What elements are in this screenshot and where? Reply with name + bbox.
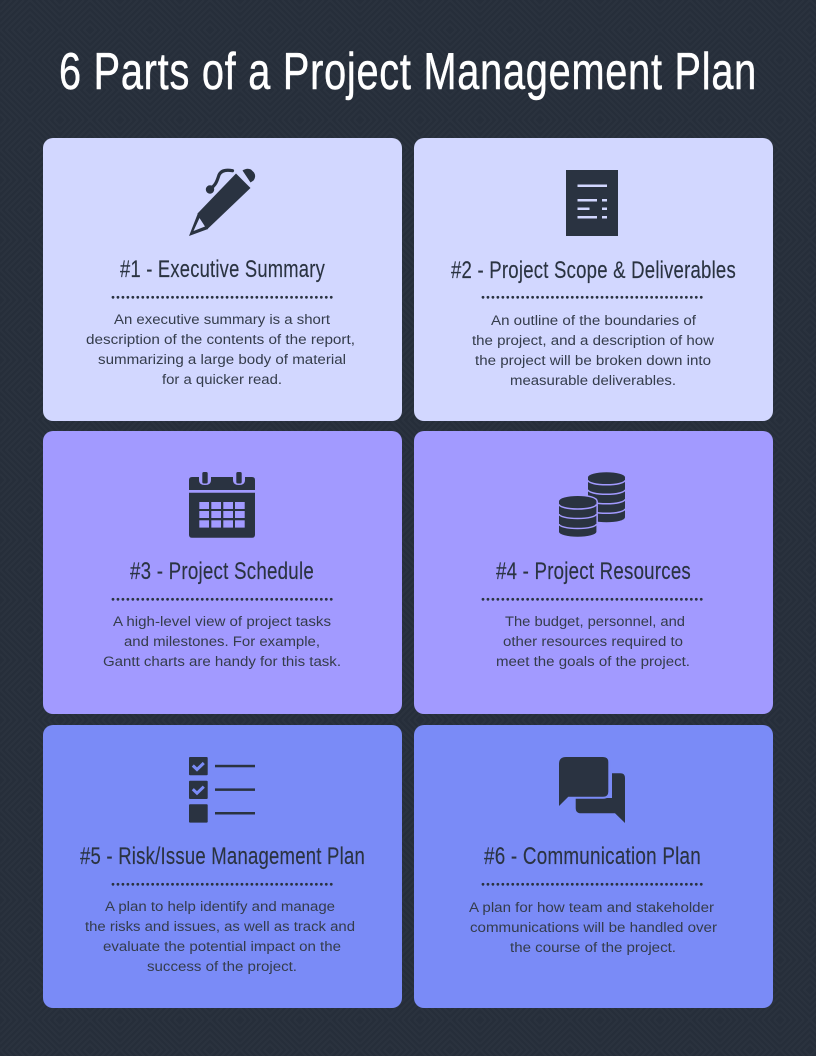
- text block: success of the project.: [147, 959, 297, 975]
- text block: other resources required to: [503, 634, 683, 650]
- heading: #2 - Project Scope & Deliverables: [451, 257, 736, 284]
- text block: [86, 312, 355, 388]
- text block: A high-level view of project tasks: [113, 614, 331, 630]
- text block: the course of the project.: [510, 940, 676, 956]
- dotted divider: [113, 296, 332, 299]
- text block: [472, 313, 715, 389]
- heading: #5 - Risk/Issue Management Plan: [80, 843, 365, 870]
- dotted divider: [113, 883, 332, 886]
- text block: the project, and a description of how: [472, 333, 715, 349]
- heading: #4 - Project Resources: [496, 558, 691, 585]
- icon: speech bubbles: [557, 755, 625, 823]
- icon: coins: [559, 472, 625, 537]
- panel: project scope: [414, 138, 773, 421]
- text block: the risks and issues, as well as track and: [85, 919, 355, 935]
- text block: communications will be handled over: [470, 920, 717, 936]
- text block: A plan to help identify and manage: [105, 899, 335, 915]
- text block: A plan for how team and stakeholder: [469, 900, 714, 916]
- text block: An outline of the boundaries of: [491, 313, 696, 329]
- text block: description of the contents of the report,: [86, 332, 355, 348]
- text block: An executive summary is a short: [114, 312, 330, 328]
- text block: [85, 899, 355, 975]
- text block: for a quicker read.: [162, 372, 282, 388]
- panel: executive summary: [43, 138, 402, 421]
- text block: Gantt charts are handy for this task.: [103, 654, 341, 670]
- text block: summarizing a large body of material: [98, 352, 346, 368]
- text block: [496, 614, 690, 670]
- heading: #6 - Communication Plan: [484, 843, 701, 870]
- icon: calendar: [189, 472, 255, 538]
- dotted divider: [483, 296, 702, 299]
- panel: risk management: [43, 725, 402, 1008]
- text block: [469, 900, 717, 956]
- icon: document: [566, 170, 618, 236]
- panel: project resources: [414, 431, 773, 714]
- heading: #3 - Project Schedule: [130, 558, 314, 585]
- text block: and milestones. For example,: [124, 634, 320, 650]
- dotted divider: [483, 598, 702, 601]
- text block: [103, 614, 341, 670]
- text block: the project will be broken down into: [475, 353, 711, 369]
- dotted divider: [483, 883, 702, 886]
- panel: project schedule: [43, 431, 402, 714]
- text block: meet the goals of the project.: [496, 654, 690, 670]
- text block: measurable deliverables.: [510, 373, 676, 389]
- heading: #1 - Executive Summary: [120, 256, 325, 283]
- text block: The budget, personnel, and: [505, 614, 685, 630]
- panel: communication plan: [414, 725, 773, 1008]
- text block: evaluate the potential impact on the: [103, 939, 341, 955]
- dotted divider: [113, 598, 332, 601]
- icon: pen: [189, 169, 255, 236]
- icon: checklist: [189, 757, 255, 823]
